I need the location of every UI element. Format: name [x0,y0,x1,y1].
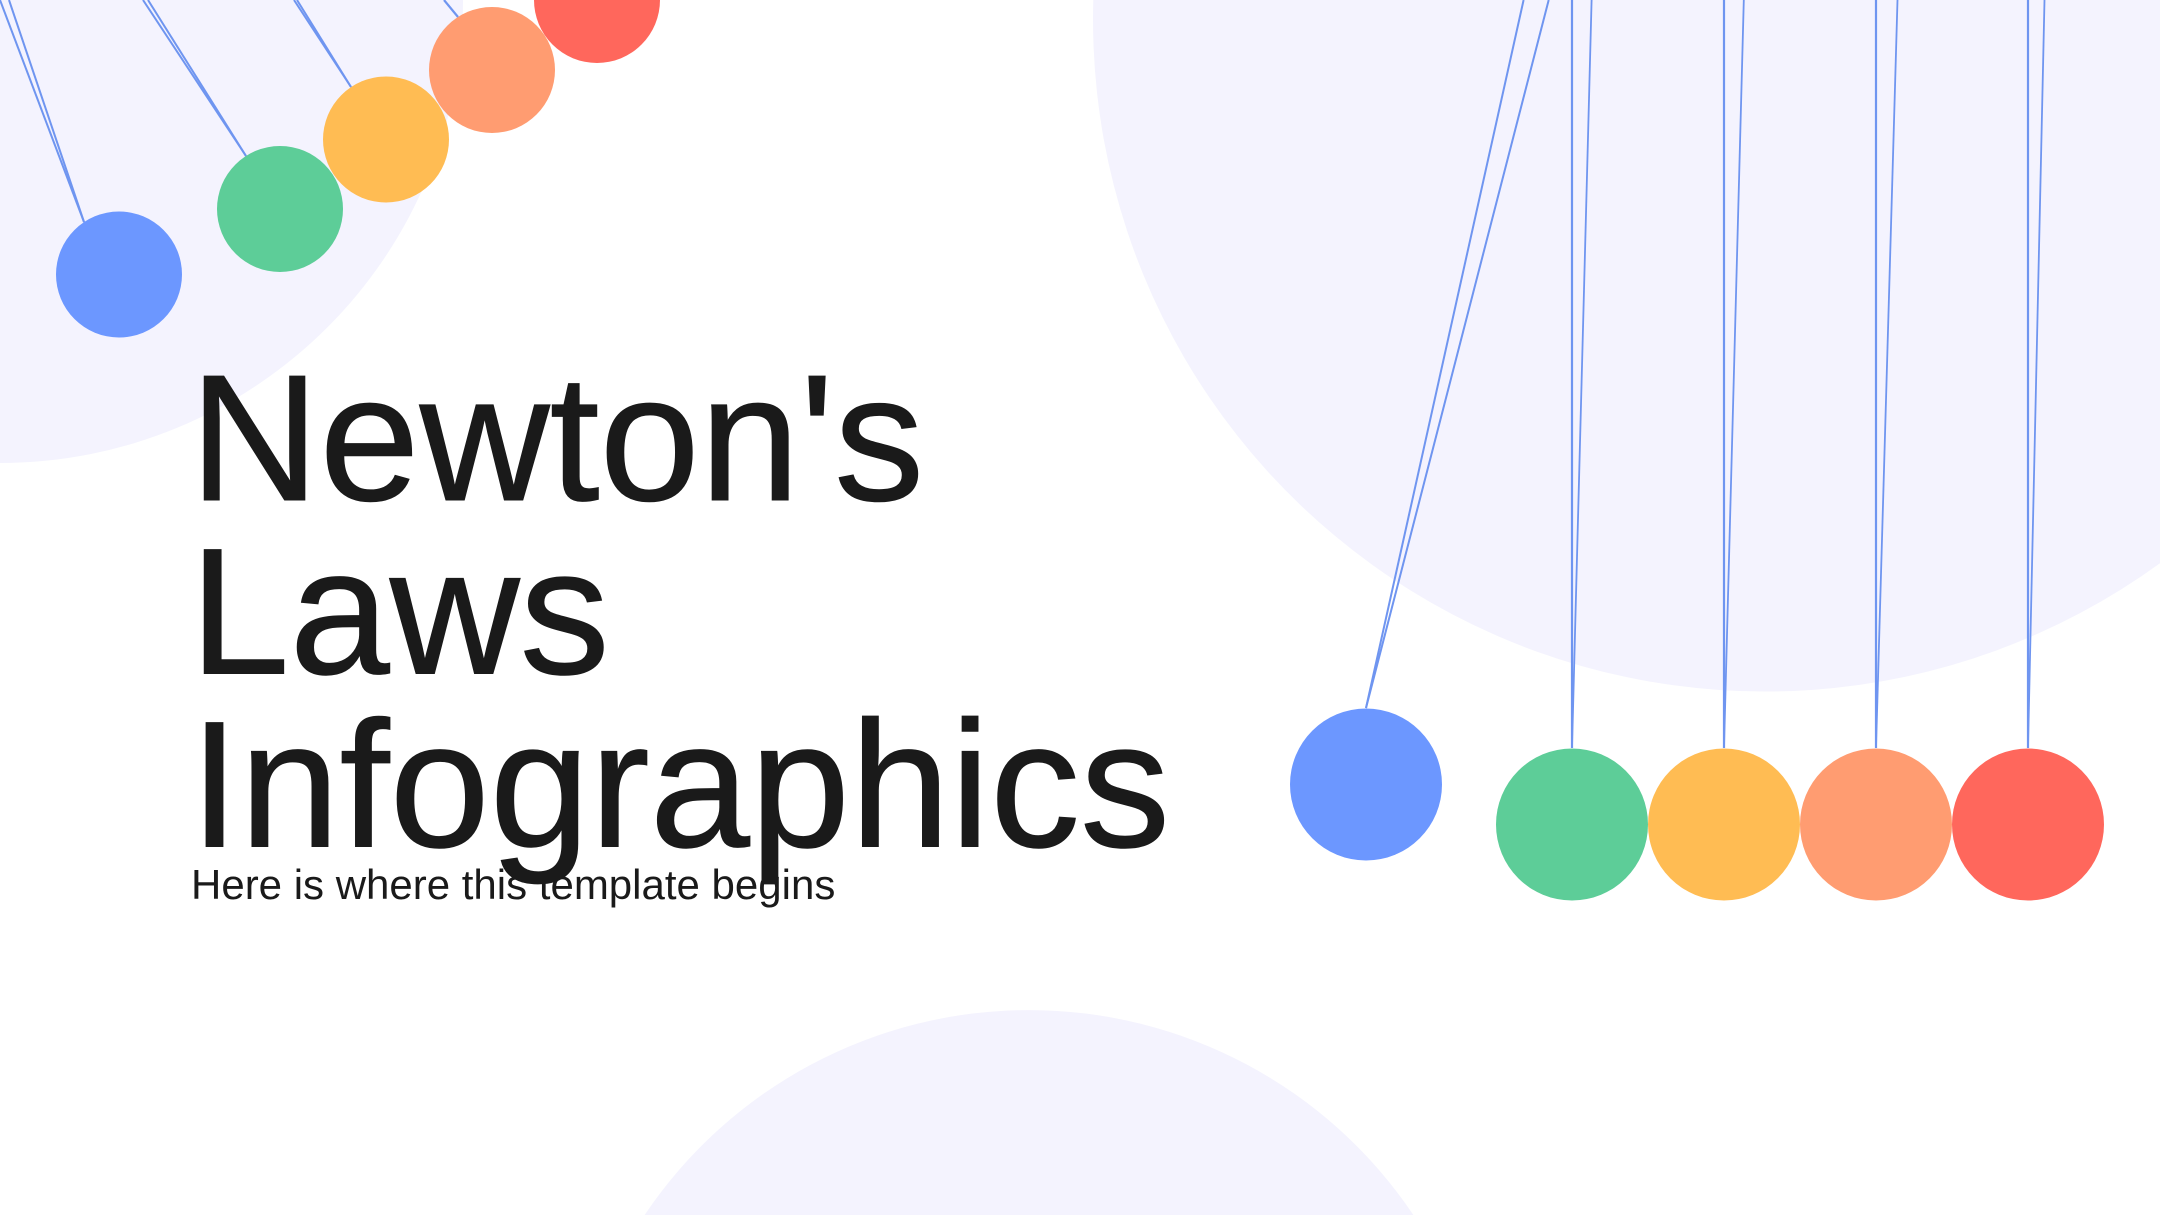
strings: blue ball [1366,0,1549,708]
strings: orange ball [1876,0,1898,748]
background circle: top left [0,0,463,463]
strings: green ball [1572,0,1592,748]
strings: blue ball [0,0,84,222]
ball: red [534,0,660,63]
ball: yellow [323,76,449,202]
background circle: bottom [645,1010,1413,1215]
ball: orange [429,7,555,133]
ball: blue [1290,708,1442,860]
pendulum group: right cradle [1290,0,2104,900]
ball: blue [56,212,182,338]
strings: yellow ball [1724,0,1744,748]
ball: green [217,146,343,272]
pendulum group: swung top left [0,0,660,338]
ball: yellow [1648,748,1800,900]
title [190,338,1170,886]
title: Infographics [190,684,1170,886]
title: Newton's [190,338,924,539]
strings: red ball [2028,0,2044,748]
ball: orange [1800,748,1952,900]
background circle: top right [1093,0,2160,692]
ball: green [1496,748,1648,900]
title: Laws [190,512,610,712]
strings: yellow ball [294,0,351,87]
strings: green ball [143,0,246,156]
strings: orange ball [444,0,458,17]
subtitle: Here is where this template begins [191,861,835,908]
ball: red [1952,748,2104,900]
